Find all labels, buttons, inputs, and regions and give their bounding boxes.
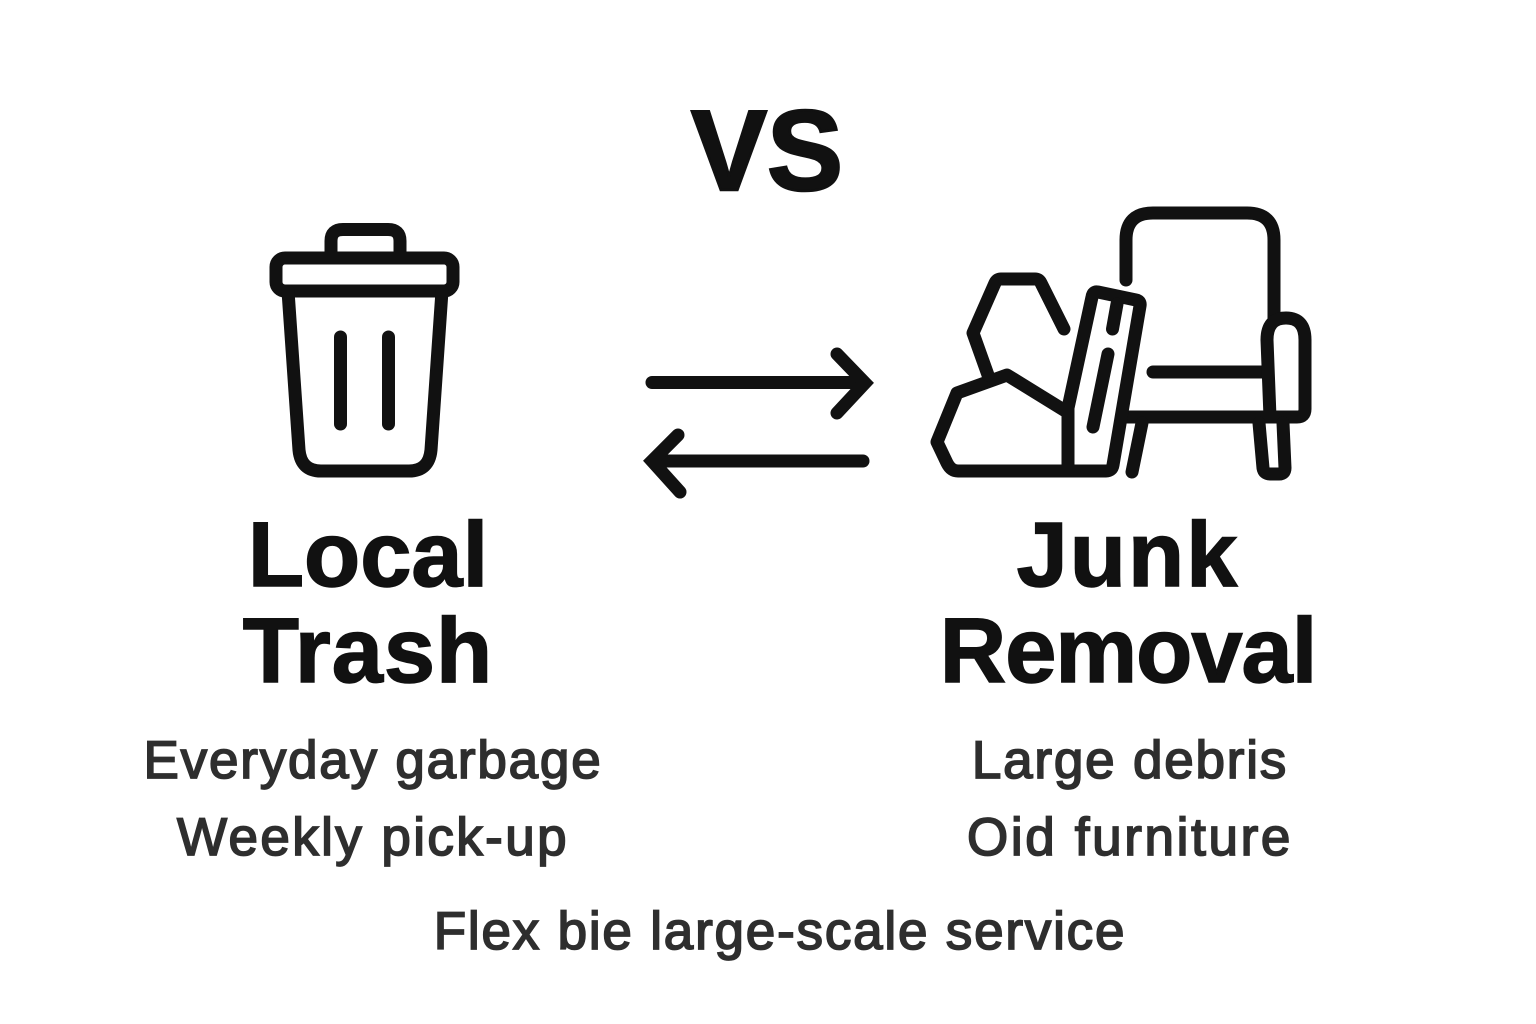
icon: junk pile with armchair	[937, 213, 1305, 474]
heading: Junk Removal	[940, 504, 1316, 702]
caption: Flex bie large-scale service	[434, 902, 1126, 961]
icon: exchange arrows	[652, 354, 865, 492]
heading: Local Trash: Trash	[243, 600, 493, 702]
text block: local trash details: Everyday garbage	[144, 731, 602, 790]
text block: local trash details	[144, 731, 602, 867]
title: VS: VS	[691, 88, 843, 215]
text block: junk removal details	[967, 731, 1293, 867]
text block: junk removal details: Oid furniture	[967, 808, 1293, 867]
heading: Local Trash	[243, 504, 493, 702]
text block: junk removal details: Large debris	[972, 731, 1288, 790]
heading: Junk Removal: Removal	[940, 600, 1316, 702]
icon: trash can	[276, 230, 453, 471]
heading: Local Trash: Local	[248, 504, 488, 606]
heading: Junk Removal: Junk	[1017, 504, 1239, 606]
text block: local trash details: Weekly pick-up	[177, 808, 569, 867]
